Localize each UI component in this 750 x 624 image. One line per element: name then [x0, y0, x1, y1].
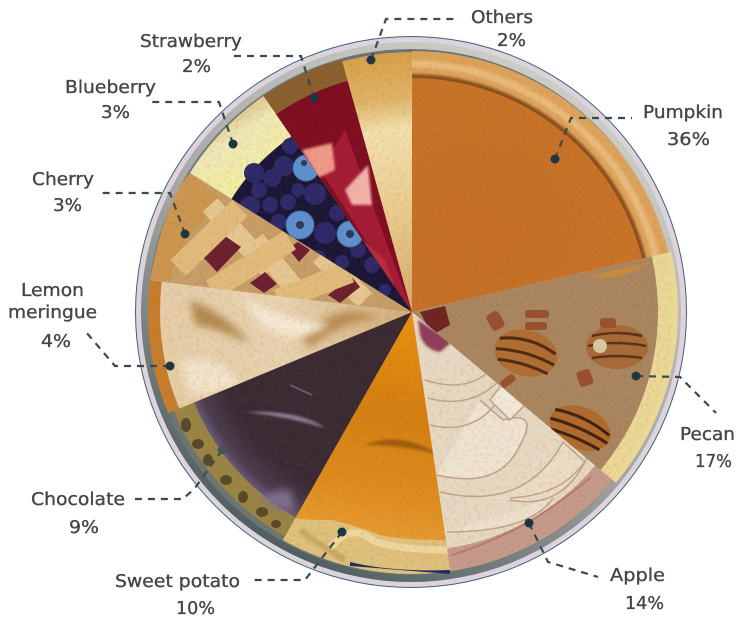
leader: chocolate	[133, 446, 226, 499]
slice: pecan 17%	[412, 252, 678, 483]
pie slices	[146, 46, 678, 579]
plate	[135, 36, 687, 588]
label: others 2%: Others	[471, 7, 533, 28]
leader: pecan	[632, 372, 716, 413]
label: pecan 17%	[680, 424, 735, 472]
label: blueberry 3%	[65, 77, 156, 123]
label: others 2%: 2%	[497, 30, 526, 51]
texture overlay	[150, 50, 675, 575]
apple slices	[425, 355, 587, 532]
label: others 2%	[471, 7, 533, 51]
slice: strawberry 2%	[264, 60, 412, 312]
pecan nut: left	[494, 329, 558, 377]
slice: others 2%	[342, 52, 412, 312]
label: sweet potato 10%	[115, 571, 240, 619]
crust crimps	[181, 418, 281, 528]
label: lemon meringue 4%	[8, 280, 97, 352]
slice: pumpkin 36%	[412, 51, 668, 312]
label: chocolate 9%	[31, 489, 125, 538]
lattice holes	[202, 234, 360, 303]
leader: pumpkin	[550, 118, 632, 164]
label: strawberry 2%	[140, 31, 242, 77]
pecan nut: right	[586, 325, 648, 369]
slice: apple 14%	[412, 312, 612, 572]
label: pumpkin 36%	[643, 102, 723, 150]
label: blueberry 3%: Blueberry	[65, 77, 156, 98]
pecan nut: lower	[549, 405, 611, 452]
label: lemon meringue 4%: 4%	[41, 331, 71, 352]
leader: cherry	[100, 193, 190, 238]
lattice cross bars	[210, 205, 365, 300]
label: sweet potato 10%: 10%	[176, 598, 215, 619]
lattice bars	[178, 208, 350, 300]
label: lemon meringue 4%: meringue	[8, 302, 97, 323]
label: lemon meringue 4%: Lemon	[21, 280, 84, 301]
slice: cherry 3%	[150, 173, 412, 312]
label: chocolate 9%: 9%	[69, 517, 99, 538]
label: cherry 3%	[32, 169, 94, 216]
leader: lemon meringue	[86, 332, 174, 370]
leader: others	[366, 19, 455, 64]
label: pumpkin 36%: Pumpkin	[643, 102, 723, 123]
label: pecan 17%: Pecan	[680, 424, 735, 445]
slice: sweet potato 10%	[282, 312, 450, 574]
slice: lemon meringue 4%	[148, 280, 412, 414]
leader: strawberry	[230, 56, 318, 102]
berries	[240, 138, 391, 296]
label: chocolate 9%: Chocolate	[31, 489, 125, 510]
light blue berries	[286, 155, 363, 247]
label: strawberry 2%: Strawberry	[140, 31, 242, 52]
pecan pieces	[420, 306, 616, 389]
label: apple 14%	[610, 565, 665, 614]
label: pumpkin 36%: 36%	[667, 129, 710, 150]
label: cherry 3%: Cherry	[32, 169, 94, 190]
label: strawberry 2%: 2%	[182, 56, 211, 77]
label: apple 14%: Apple	[610, 565, 665, 586]
label: apple 14%: 14%	[625, 593, 664, 614]
label: pecan 17%: 17%	[695, 451, 732, 472]
leader: sweet potato	[253, 528, 346, 580]
label: blueberry 3%: 3%	[101, 102, 130, 123]
leader: blueberry	[149, 102, 238, 148]
leader: apple	[524, 518, 598, 577]
slice: chocolate 9%	[174, 312, 412, 536]
slice: blueberry 3%	[190, 96, 412, 312]
label: cherry 3%: 3%	[53, 195, 82, 216]
label: sweet potato 10%: Sweet potato	[115, 571, 240, 592]
